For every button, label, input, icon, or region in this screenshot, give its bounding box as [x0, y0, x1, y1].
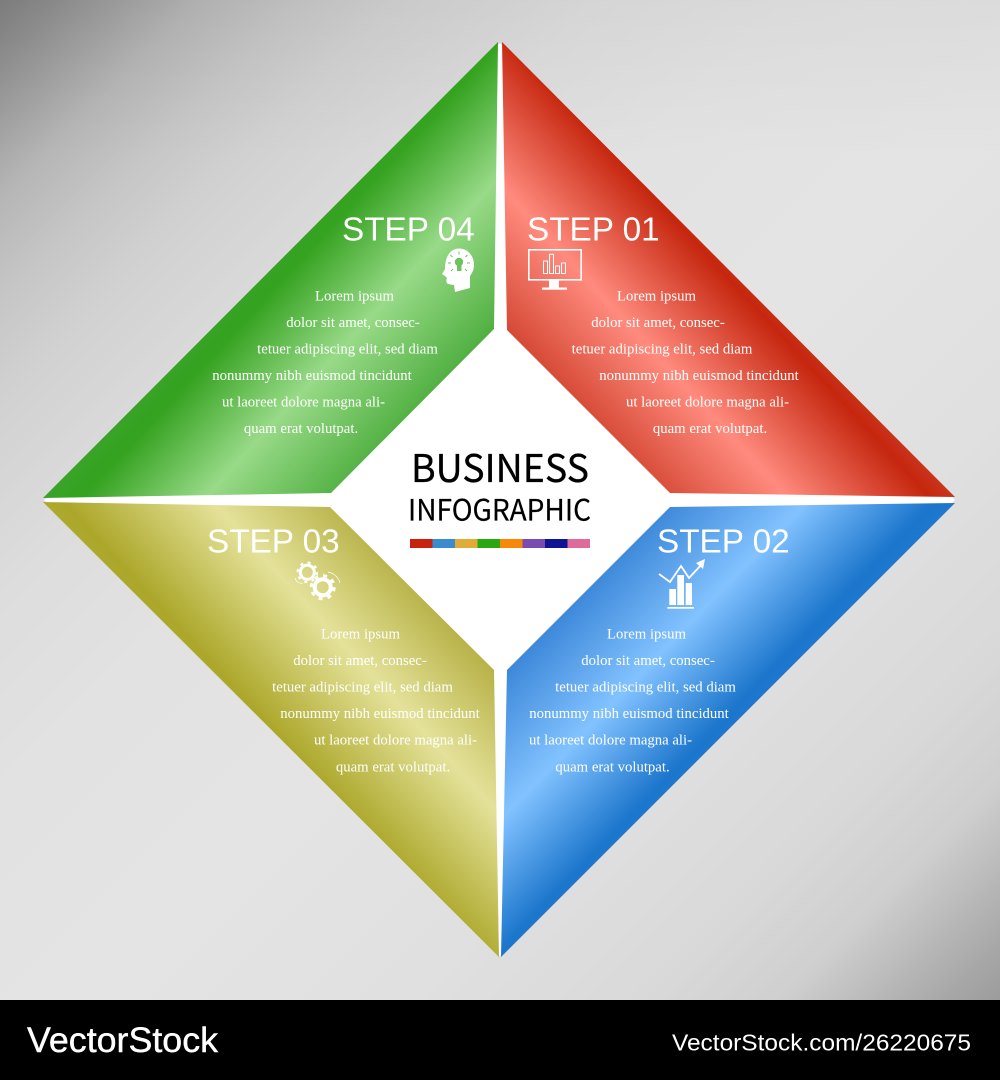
body text: step 03: [272, 626, 481, 775]
body text: step 01: Lorem ipsum: [617, 288, 697, 304]
white diamond base and centre: [44, 43, 955, 956]
body text: step 04: [212, 288, 438, 437]
body text: step 01: dolor sit amet, consec-: [591, 315, 725, 331]
body text: step 01: ut laoreet dolore magna ali-: [626, 394, 789, 410]
body text: step 03: Lorem ipsum: [321, 626, 401, 642]
body text: step 03: nonummy nibh euismod tincidunt: [280, 706, 481, 722]
panel: step 02 blue: [501, 503, 955, 957]
body text: step 03: quam erat volutpat.: [336, 759, 450, 775]
body text: step 03: ut laoreet dolore magna ali-: [314, 733, 477, 749]
body text: step 04: Lorem ipsum: [315, 288, 395, 304]
body text: step 04: ut laoreet dolore magna ali-: [222, 394, 385, 410]
body text: step 01: nonummy nibh euismod tincidunt: [599, 368, 800, 384]
body text: step 04: quam erat volutpat.: [244, 421, 358, 437]
body text: step 03: tetuer adipiscing elit, sed diam: [272, 680, 453, 696]
panel: step 01 red: [502, 42, 955, 497]
body text: step 02: dolor sit amet, consec-: [581, 653, 715, 669]
panel: step 04 green: [43, 42, 498, 498]
icon: head with light bulb: [442, 248, 474, 292]
footer bar: [0, 1000, 1000, 1080]
body text: step 02: tetuer adipiscing elit, sed diam: [555, 680, 736, 696]
body text: step 02: nonummy nibh euismod tincidunt: [529, 706, 730, 722]
body text: step 01: tetuer adipiscing elit, sed diam: [572, 342, 753, 358]
title: business: BUSINESS: [411, 438, 589, 494]
subtitle: infographic: INFOGRAPHIC: [408, 488, 591, 530]
heading: step 04: STEP 04: [342, 212, 475, 248]
panel: step 03 yellow: [43, 502, 499, 957]
colour strip: [410, 539, 590, 548]
body text: step 04: tetuer adipiscing elit, sed diam: [257, 342, 438, 358]
heading: step 02: STEP 02: [657, 523, 790, 560]
body text: step 02: [529, 626, 736, 775]
body text: step 04: dolor sit amet, consec-: [286, 315, 420, 331]
body text: step 04: nonummy nibh euismod tincidunt: [212, 368, 413, 384]
icon: gears: [295, 563, 340, 599]
icon: monitor with bar chart: [529, 250, 581, 290]
icon: growth chart with arrow: [659, 559, 705, 609]
heading: step 01: STEP 01: [527, 212, 660, 248]
body text: step 01: [572, 288, 800, 437]
body text: step 02: Lorem ipsum: [607, 626, 687, 642]
centre title: [408, 438, 591, 548]
footer logo: VectorStock: [27, 1021, 219, 1060]
body text: step 01: quam erat volutpat.: [653, 421, 767, 437]
body text: step 02: quam erat volutpat.: [555, 759, 670, 775]
body text: step 03: dolor sit amet, consec-: [293, 653, 427, 669]
body text: step 02: ut laoreet dolore magna ali-: [529, 733, 692, 749]
heading: step 03: STEP 03: [207, 523, 340, 560]
footer url: VectorStock.com/26220675: [672, 1030, 971, 1056]
